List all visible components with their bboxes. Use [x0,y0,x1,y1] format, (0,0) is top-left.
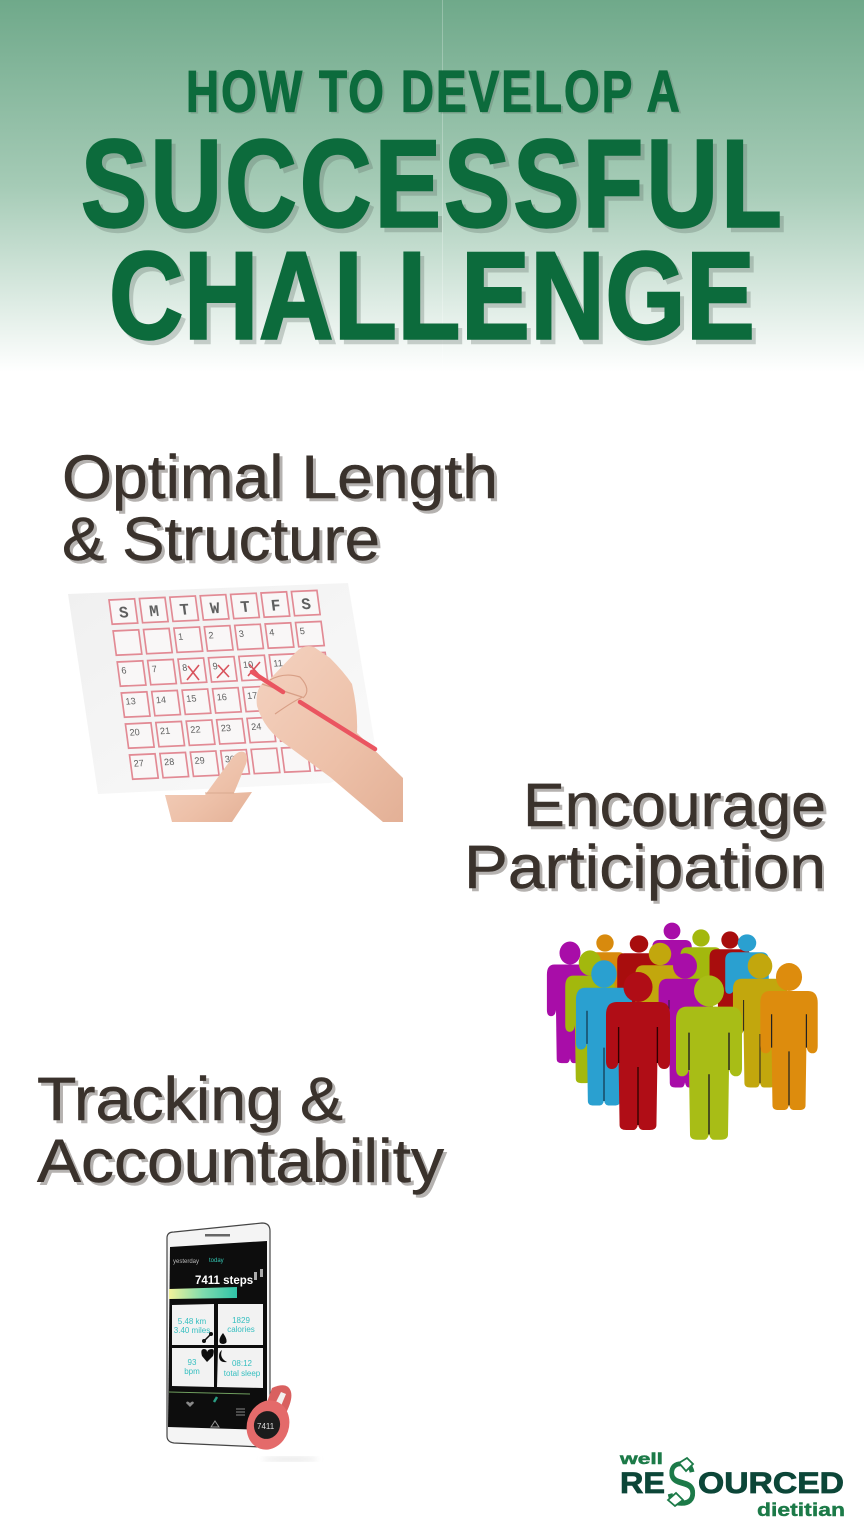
stat tiles: bpm [184,1367,200,1376]
red pencil [252,672,375,749]
heading: Encourage Participation: Participation [467,836,828,904]
logo: Well Resourced Dietitian: S [666,1450,697,1519]
heading: Encourage Participation: Participation [464,833,826,901]
heading: Encourage Participation [464,771,829,904]
calendar grid: 17 [246,691,258,701]
calendar paper [68,583,378,794]
title: SUCCESSFUL [81,114,782,253]
steps readout: today [209,1258,224,1264]
heading: Tracking & Accountability: Tracking & [40,1068,346,1136]
phone screen [168,1241,267,1430]
steps readout [173,1258,253,1287]
calendar grid: S [300,596,313,614]
heading: Tracking & Accountability: Accountability [40,1130,448,1198]
calendar grid: 13 [125,696,136,707]
calendar grid: 7 [151,664,158,674]
stat tiles: total sleep [224,1369,261,1378]
calendar grid: W [209,600,221,618]
heading: Optimal Length & Structure: & Structure [65,508,383,576]
calendar grid: 3 [238,629,245,639]
tile icons: dumbbell, flame, heart, moon [201,1332,227,1362]
title: CHALLENGE [113,232,759,370]
calendar grid: T [179,601,191,620]
phone speaker [205,1234,230,1236]
calendar grid: 24 [251,722,262,732]
stat tiles [172,1304,263,1388]
calendar grid: T [239,598,252,617]
stat tiles: 1829 [232,1316,250,1325]
heading: Tracking & Accountability: Tracking & [37,1065,343,1133]
calendar grid: 6 [121,665,127,676]
calendar grid: 30 [224,754,236,764]
calendar grid: 9 [212,661,218,671]
fitness tracker clip: 7411 [257,1422,275,1431]
heading: Encourage Participation: Encourage [526,774,829,842]
app nav bar [169,1392,250,1427]
calendar grid: 29 [194,755,205,766]
calendar grid: 28 [163,757,175,767]
steps readout: yesterday [173,1259,199,1265]
writing hand [257,646,403,822]
logo: Well Resourced Dietitian [619,1450,845,1520]
calendar photo [68,583,403,822]
title [81,60,786,370]
calendar grid: 5 [299,626,305,636]
heading: Optimal Length & Structure: Optimal Length [62,443,498,511]
calendar grid: 11 [273,658,284,669]
title: HOW TO DEVELOP A [188,62,682,126]
stat tiles: 3.40 miles [174,1326,210,1335]
logo: Well Resourced Dietitian: dietitian [757,1499,845,1520]
title: SUCCESSFUL [85,118,786,258]
stat tiles: 08:12 [232,1359,253,1368]
calendar grid: 16 [216,692,228,702]
title: CHALLENGE [109,228,755,366]
heading: Tracking & Accountability [37,1065,448,1198]
calendar grid: 20 [129,727,140,738]
fitness tracker clip [240,1385,296,1455]
stat tiles: calories [227,1325,255,1334]
calendar grid: 10 [242,660,254,670]
logo: Well Resourced Dietitian: well [619,1451,663,1468]
heading: Optimal Length & Structure: Optimal Length [65,446,501,514]
calendar grid: 15 [186,693,197,704]
logo: Well Resourced Dietitian: RE [620,1467,665,1500]
calendar grid: 8 [182,663,188,673]
red crosses [187,662,260,680]
steps readout: 7411 steps [195,1275,253,1287]
tracker ground shadow [262,1456,318,1462]
calendar grid: 4 [269,627,275,638]
calendar grid: 23 [220,723,232,733]
calendar grid: 27 [133,758,145,769]
calendar grid: 2 [208,630,214,640]
stat tiles: 5.48 km [178,1317,207,1326]
title: HOW TO DEVELOP A [186,60,680,125]
calendar grid: M [148,603,160,621]
icon: crowd of colored people [547,923,818,1140]
heading: Encourage Participation: Encourage [523,771,826,839]
step progress bar [169,1287,237,1299]
calendar grid: 22 [190,724,201,735]
header gradient band [0,0,864,372]
heading: Tracking & Accountability: Accountability [37,1127,445,1195]
calendar grid: 14 [155,695,167,705]
phone and tracker photo [167,1223,318,1462]
heading: Optimal Length & Structure: & Structure [62,505,380,573]
footprints icon [254,1269,263,1280]
calendar grid: 21 [159,726,171,736]
heading: Optimal Length & Structure [62,443,501,576]
calendar grid: F [270,597,282,616]
supporting hand [165,752,252,822]
calendar grid: S [118,604,130,623]
logo: Well Resourced Dietitian: OURCED [698,1467,844,1500]
phone body [167,1223,270,1447]
calendar grid [109,590,341,779]
stat tiles: 93 [188,1358,197,1367]
calendar grid: 1 [177,632,184,642]
